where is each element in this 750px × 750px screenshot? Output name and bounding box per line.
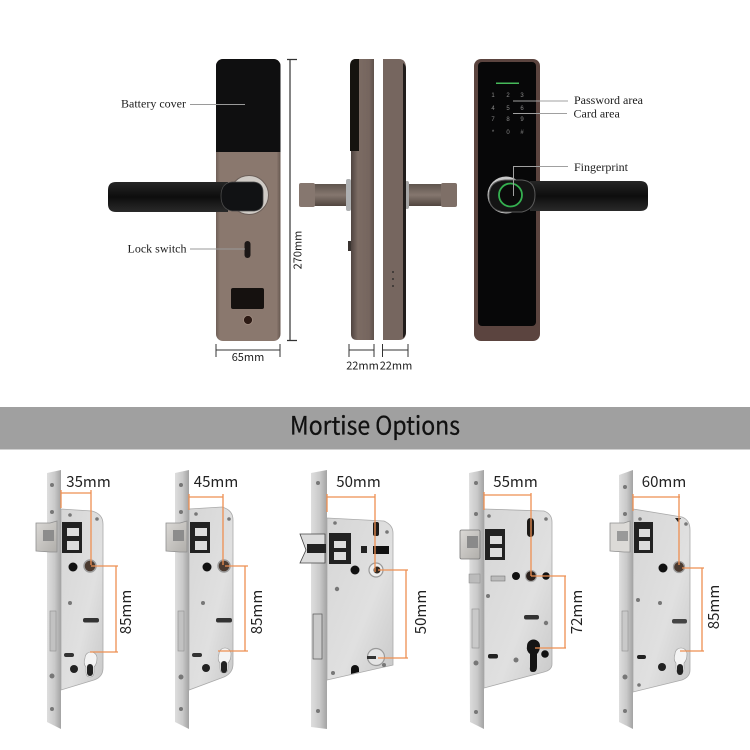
screw holes: [622, 485, 688, 713]
label: battery cover: Battery cover: [121, 96, 186, 110]
screw holes: [50, 483, 99, 711]
latch: [36, 521, 57, 552]
lock case: [484, 509, 552, 688]
dimension: 65mm: [216, 344, 280, 365]
label: lock switch: Lock switch: [128, 242, 186, 256]
keypad: 8: [506, 117, 510, 123]
mortise option: 55mm / 72mm: [460, 470, 587, 729]
cylinder cut-out: [674, 648, 687, 673]
spindle right: [408, 184, 451, 206]
latch: [460, 530, 480, 559]
keypad: *: [492, 130, 495, 136]
faceplate: [619, 470, 633, 729]
battery cover: [216, 59, 280, 152]
dimension: 270mm: 270mm: [290, 231, 306, 269]
keypad: 4: [491, 106, 495, 112]
dimension: 22mm 22mm: 22mm: [346, 358, 379, 374]
orange dimension lines: [327, 494, 408, 658]
lock case: [61, 509, 103, 690]
lock back view: [108, 59, 280, 341]
cylinder cut-out: [218, 648, 231, 673]
dimension: 22mm 22mm: [346, 344, 412, 374]
faceplate: [47, 470, 61, 729]
latch: [300, 534, 325, 563]
spindle left: [307, 184, 348, 206]
mortise option: 50mm / 50mm: [300, 470, 431, 729]
keypad: 3: [520, 93, 524, 99]
orange dimension lines: [633, 494, 704, 651]
label: password area: [513, 93, 644, 107]
label: battery cover: [121, 96, 245, 110]
label: fingerprint: Fingerprint: [574, 160, 629, 174]
section heading band: [0, 406, 750, 450]
dimension: 65mm: 65mm: [232, 349, 264, 365]
front handle knob: [489, 180, 535, 212]
battery slot: [231, 288, 264, 309]
front plate: [474, 59, 540, 341]
keypad: 5: [506, 106, 510, 112]
dimension: 270mm: [287, 60, 306, 340]
keypad: 1: [491, 93, 495, 99]
keypad: 7: [491, 117, 495, 123]
glass panel: [478, 62, 536, 326]
keypad: 0: [506, 130, 510, 136]
back handle knob: [221, 182, 263, 211]
screw holes: [474, 481, 548, 714]
keypad: #: [520, 130, 524, 136]
keypad: 2: [506, 93, 510, 99]
screw holes: [316, 481, 389, 713]
case cut-outs: [485, 529, 505, 560]
case cut-outs: [190, 522, 210, 553]
faceplate: [175, 470, 189, 729]
cylinder cut-out: [84, 652, 97, 677]
orange dimension lines: [484, 492, 566, 648]
label: password area: Password area: [574, 93, 644, 107]
rose: [488, 176, 524, 214]
latch: [166, 521, 187, 552]
dimension: 22mm 22mm: 22mm: [380, 358, 412, 374]
lock side view left: [299, 59, 374, 340]
dimension text: 35mm: [66, 471, 111, 492]
dimension text: 55mm: [493, 471, 538, 492]
lock front view: [474, 59, 648, 341]
reset button: [244, 316, 252, 324]
keypad: [491, 93, 524, 136]
dimension text: 60mm: [642, 471, 686, 492]
label: card area: [513, 106, 620, 120]
label: lock switch: [128, 242, 245, 256]
lock switch: [244, 241, 250, 258]
front handle bar: [530, 181, 648, 211]
faceplate: [311, 470, 327, 729]
mortise option: 45mm / 85mm: [166, 470, 267, 729]
keypad: 6: [520, 106, 524, 112]
mortise option: 60mm / 85mm: [610, 470, 724, 729]
screw holes: [178, 483, 231, 711]
case cut-outs: [62, 522, 82, 553]
mortise option: 50mm / 50mm: 50mm: [410, 590, 431, 634]
lock case: [327, 518, 393, 680]
mortise option: 60mm / 85mm: 85mm: [703, 585, 724, 629]
dimension text: 45mm: [194, 471, 238, 492]
mortise option: 35mm / 85mm: 85mm: [115, 590, 136, 634]
side black strip: [350, 59, 359, 151]
dimension text: 50mm: [336, 471, 381, 492]
latch: [610, 521, 630, 552]
label: card area: Card area: [574, 106, 620, 120]
fingerprint ring: [499, 184, 522, 206]
green status bar: [496, 82, 519, 84]
keypad: 9: [520, 117, 524, 123]
back handle bar: [108, 182, 228, 212]
lock case: [633, 509, 690, 692]
lock side view right: [383, 59, 457, 340]
mortise option: 55mm / 72mm: 72mm: [566, 590, 587, 634]
case cut-outs: [634, 522, 653, 553]
back plate: [216, 59, 280, 341]
handle rose: [230, 176, 268, 214]
faceplate: [469, 470, 484, 729]
section heading band: Mortise Options: [290, 406, 460, 442]
mortise option: 35mm / 85mm: [36, 470, 136, 729]
orange dimension lines: [61, 490, 118, 652]
side plate left: [351, 59, 374, 340]
cylinder cut-out: [527, 640, 540, 672]
lock case: [189, 507, 233, 690]
orange dimension lines: [189, 494, 248, 651]
side plate right: [383, 59, 406, 340]
mortise option: 45mm / 85mm: 85mm: [246, 590, 267, 634]
case cut-outs: [329, 533, 351, 564]
label: fingerprint: [514, 160, 629, 196]
